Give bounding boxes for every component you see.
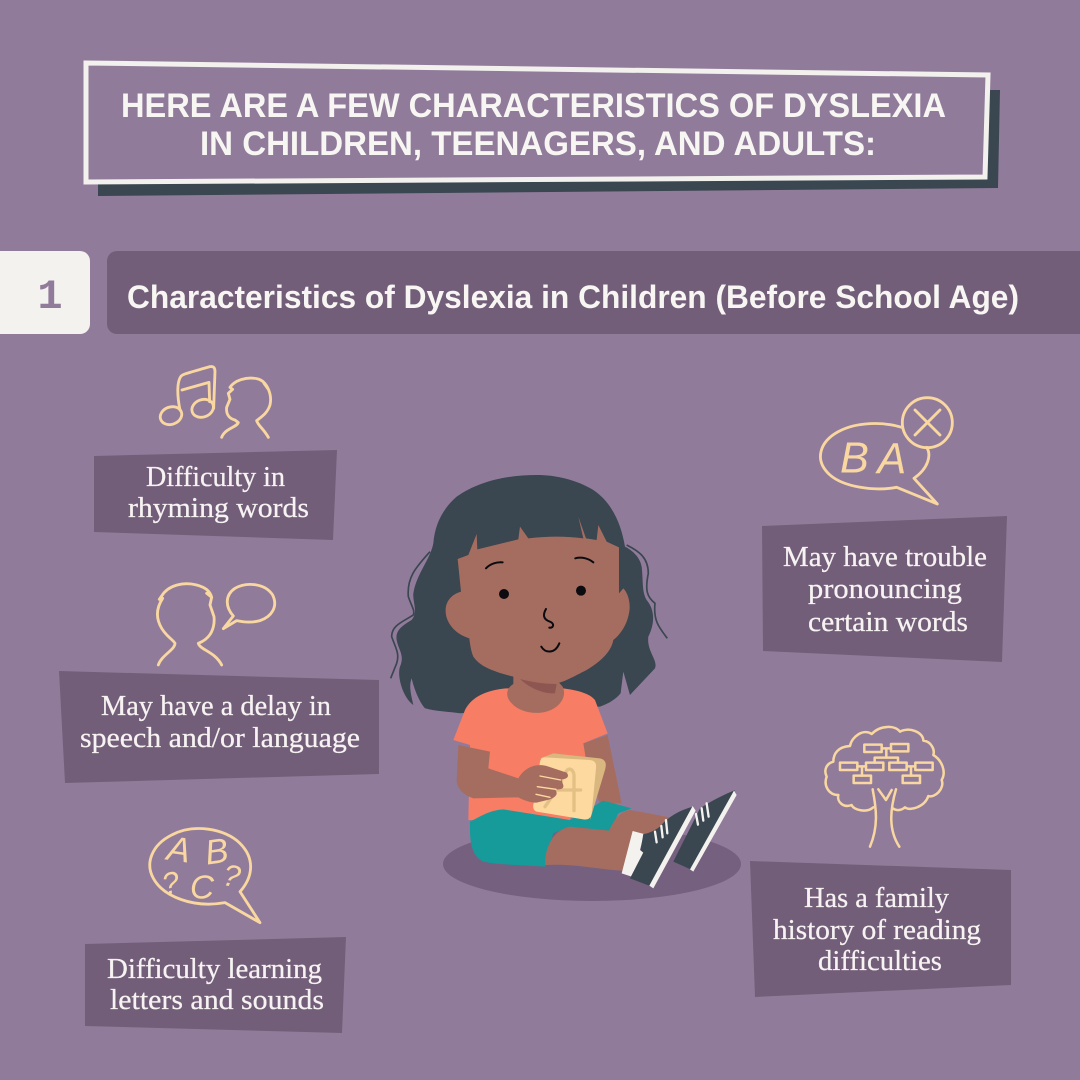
- icon: letters speech bubble: ?: [159, 865, 183, 902]
- face: [446, 517, 630, 683]
- shorts: [470, 801, 632, 867]
- icon: letters speech bubble: A: [163, 829, 193, 871]
- panel: pronouncing: certain words: [808, 607, 968, 638]
- panel: letters and sounds: [85, 937, 346, 1033]
- illustration: child with block: [391, 475, 741, 901]
- floor shadow: [443, 827, 741, 901]
- icon: letters speech bubble: [150, 829, 260, 923]
- icon: letters speech bubble: B: [203, 832, 231, 873]
- panel: rhyming words: Difficulty in: [146, 462, 285, 493]
- panel: pronouncing: [762, 516, 1007, 662]
- neck: [507, 673, 564, 713]
- panel: pronouncing: May have trouble: [783, 542, 987, 573]
- panel: pronouncing: pronouncing: [808, 574, 962, 605]
- panel: family history: difficulties: [818, 946, 942, 977]
- title banner: HERE ARE A FEW CHARACTERISTICS OF DYSLEXIA: [121, 87, 946, 125]
- legs: [545, 810, 670, 871]
- arm and hand: [457, 745, 568, 803]
- title banner: IN CHILDREN, TEENAGERS, AND ADULTS:: [200, 125, 876, 163]
- far shoe: [673, 790, 735, 869]
- section heading: [107, 251, 1080, 334]
- right arm: [583, 735, 622, 803]
- sock: [622, 831, 644, 877]
- panel: family history: Has a family: [804, 883, 949, 914]
- icon: pronunciation bubble: [820, 398, 952, 504]
- title banner: [86, 63, 1000, 196]
- panel: family history: [750, 861, 1011, 997]
- panel: speech delay: May have a delay in: [101, 691, 331, 722]
- panel: speech delay: speech and/or language: [80, 723, 360, 754]
- shirt: [453, 688, 608, 820]
- hair: [391, 475, 667, 713]
- near shoe: [630, 807, 693, 886]
- panel: family history: history of reading: [773, 915, 981, 946]
- panel: letters and sounds: letters and sounds: [110, 985, 324, 1016]
- icon: pronunciation bubble: B: [840, 435, 869, 483]
- number badge: 1: [37, 273, 63, 321]
- number badge: [0, 251, 90, 334]
- block: [540, 753, 606, 820]
- facial features: [499, 589, 509, 599]
- panel: letters and sounds: Difficulty learning: [107, 954, 322, 985]
- panel: rhyming words: [94, 450, 337, 540]
- panel: rhyming words: rhyming words: [128, 493, 309, 524]
- icon: family tree: [825, 727, 944, 847]
- icon: letters speech bubble: ?: [220, 858, 243, 895]
- panel: speech delay: [59, 671, 379, 783]
- section heading: Characteristics of Dyslexia in Children (Before School Age): [127, 279, 1019, 315]
- icon: music note and head: [158, 367, 271, 437]
- icon: head and speech bubble: [157, 584, 275, 665]
- icon: letters speech bubble: C: [190, 869, 215, 906]
- neck shadow: [520, 679, 557, 693]
- icon: pronunciation bubble: A: [874, 435, 906, 483]
